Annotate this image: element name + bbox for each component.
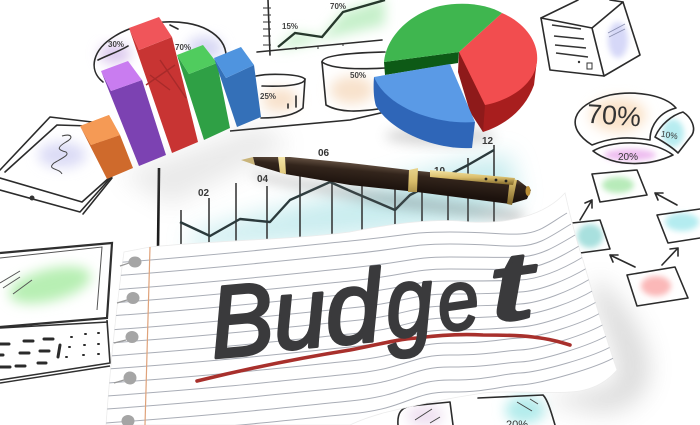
pen: gold bands (278, 157, 517, 205)
heading: Budget: g (382, 244, 437, 359)
sketch: tablet (0, 117, 113, 214)
sketch: 25% cylinder (256, 74, 305, 118)
lower line chart: 04 (257, 174, 269, 185)
sketch: pie outline behind bars (94, 22, 226, 82)
bar: orange (80, 115, 133, 179)
sketch: top line chart (257, 0, 385, 55)
heading: Budget: t (481, 230, 546, 342)
bar: purple (101, 61, 166, 166)
slice: red (458, 13, 537, 132)
shadows under bars and pie (120, 125, 495, 205)
paper note (106, 193, 617, 425)
sketch: pie outline behind bars: 30% (108, 40, 124, 49)
sketch: laptop (0, 243, 112, 383)
paper: ruled lines (106, 213, 617, 425)
lower line chart (158, 136, 520, 250)
sketch: 50% cylinder: 50% (350, 71, 366, 80)
bar: green (177, 45, 230, 140)
sketch: pie outline behind bars: 70% (175, 43, 191, 52)
sketch: top line chart: 15% (282, 22, 298, 31)
sketch: base line (230, 112, 385, 131)
sketch: 25% cylinder: 25% (260, 92, 276, 101)
3D pie chart (374, 4, 537, 148)
heading: Budget: B (205, 261, 278, 380)
sketch: bottom 20% shapes (398, 395, 555, 425)
bar chart: 3D bars (80, 17, 261, 179)
slice: blue (374, 64, 475, 148)
paper shadow (540, 280, 649, 412)
lower line chart: 02 (198, 188, 210, 199)
label 70%: 70% (586, 99, 642, 132)
sketch: percent diagram: 10% (660, 128, 679, 141)
bar: blue (214, 47, 261, 127)
underline (197, 335, 570, 381)
heading: Budget: u (268, 256, 331, 371)
lower line chart: 06 (318, 148, 330, 159)
sketch: percent diagram: 20% (618, 152, 638, 163)
lower line chart: 12 (482, 136, 494, 147)
paper: punched holes (114, 256, 142, 425)
pen (241, 157, 531, 222)
sketch: percent diagram (575, 93, 694, 164)
sketch: 50% cylinder (322, 52, 385, 111)
bar: red (129, 17, 198, 153)
heading: Budget: d (320, 249, 388, 367)
pen: clip (430, 170, 515, 185)
heading: Budget (205, 230, 546, 380)
sketch: server box (541, 0, 640, 76)
sketch: top line chart: 70% (330, 2, 346, 11)
heading: Budget: e (430, 250, 485, 350)
lower line chart: 10 (434, 166, 446, 177)
paper: margin line (145, 247, 150, 425)
slice: green (384, 4, 502, 75)
sketch: flow diagram (572, 170, 700, 306)
